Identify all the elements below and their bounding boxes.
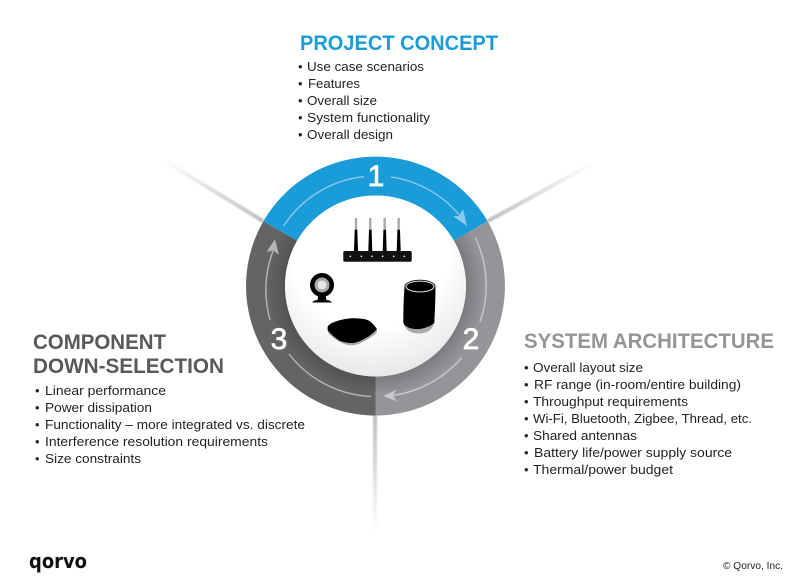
number 2: 2 <box>463 323 479 356</box>
list: system architecture items: • <box>524 462 529 477</box>
panel: component down-selection <box>33 330 305 466</box>
list: component down-selection items: • <box>35 434 40 449</box>
list: component down-selection items: Power dissipation <box>45 400 152 415</box>
list: component down-selection items: Functionality – more integrated vs. discrete <box>45 417 305 432</box>
copyright: © Qorvo, Inc. <box>723 560 783 572</box>
list: project concept items: Overall size <box>307 93 377 108</box>
number 3: 3 <box>271 323 287 356</box>
segment 3: dark gray <box>246 221 376 416</box>
list: project concept items: • <box>298 127 303 142</box>
arrow: step 2 to 3 <box>383 238 486 402</box>
list: project concept items: • <box>298 76 303 91</box>
list: system architecture items: • <box>524 360 529 375</box>
list: project concept items: Overall design <box>307 127 393 142</box>
list: project concept items: Use case scenarios <box>307 59 425 74</box>
list: component down-selection items <box>35 383 305 466</box>
list: system architecture items: • <box>524 377 529 392</box>
heading: system architecture: SYSTEM ARCHITECTURE <box>524 329 774 353</box>
icon: webcam <box>310 273 334 302</box>
connector line: bottom <box>373 415 377 532</box>
list: system architecture items: Thermal/power budget <box>533 462 673 477</box>
list: component down-selection items: • <box>35 417 40 432</box>
list: project concept items <box>298 59 431 142</box>
circular process diagram <box>246 157 505 416</box>
list: component down-selection items: Linear performance <box>45 383 166 398</box>
list: project concept items: • <box>298 110 303 125</box>
list: system architecture items <box>524 360 752 477</box>
center disc <box>285 196 466 376</box>
list: system architecture items: • <box>524 411 529 426</box>
arrow: step 3 to 1 <box>266 239 371 396</box>
list: component down-selection items: • <box>35 451 40 466</box>
list: project concept items: • <box>298 93 303 108</box>
list: system architecture items: • <box>524 428 529 443</box>
number 1: 1 <box>368 160 384 193</box>
list: project concept items: System functionality <box>307 110 431 125</box>
heading: component down-selection: COMPONENT <box>33 330 166 354</box>
list: system architecture items: • <box>524 445 529 460</box>
list: component down-selection items: Interference resolution requirements <box>45 434 269 449</box>
connector line: upper right <box>488 164 592 221</box>
panel: project concept <box>298 31 498 142</box>
list: system architecture items: Battery life/power supply source <box>534 445 732 460</box>
list: component down-selection items: Size constraints <box>45 451 142 466</box>
list: component down-selection items: • <box>35 400 40 415</box>
list: project concept items: • <box>298 59 303 74</box>
inner ring shadow on gray segments <box>246 221 505 416</box>
list: system architecture items: Wi-Fi, Bluetooth, Zigbee, Thread, etc. <box>533 411 752 426</box>
heading: component down-selection: DOWN-SELECTION <box>33 354 224 378</box>
list: system architecture items: Throughput requirements <box>533 394 689 409</box>
list: project concept items: Features <box>308 76 360 91</box>
list: system architecture items: Shared antennas <box>533 428 638 443</box>
arrow: step 1 to 2 <box>284 177 467 226</box>
list: system architecture items: RF range (in-room/entire building) <box>534 377 741 392</box>
icon: speaker <box>403 280 436 334</box>
logo: qorvo: qorvo <box>29 549 87 573</box>
list: component down-selection items: • <box>35 383 40 398</box>
list: system architecture items: Overall layout size <box>533 360 643 375</box>
panel: system architecture <box>524 329 774 477</box>
icon: router <box>343 218 412 262</box>
segment 2: light gray <box>376 221 505 416</box>
connector line: upper left <box>163 160 263 221</box>
heading: project concept: PROJECT CONCEPT <box>300 31 498 55</box>
icon: smart hub <box>328 318 377 345</box>
list: system architecture items: • <box>524 394 529 409</box>
segment 1: blue <box>263 157 488 241</box>
